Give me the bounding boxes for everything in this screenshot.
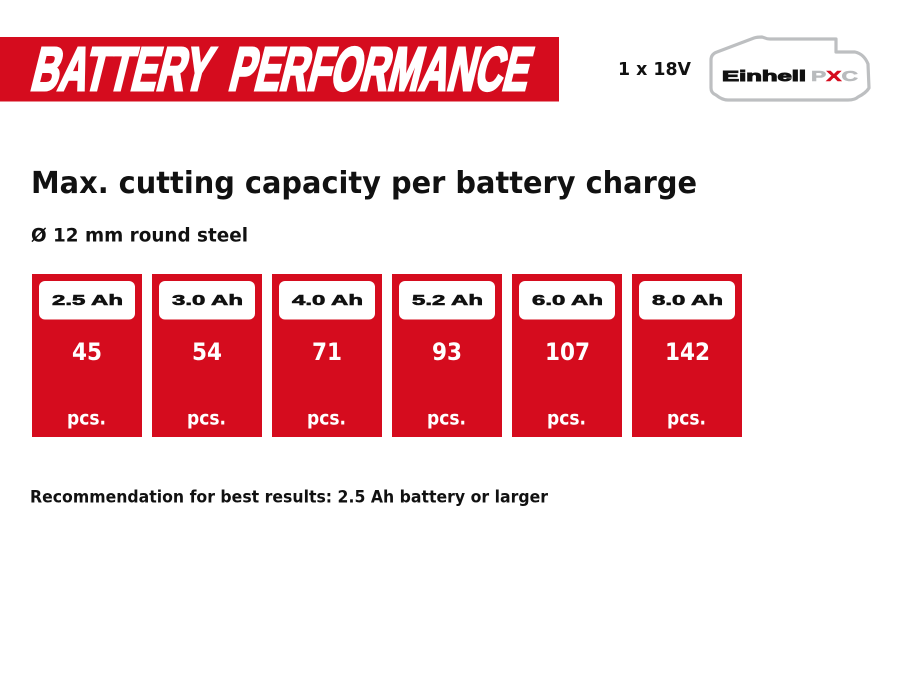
card: 2.5 Ah: 45	[72, 338, 102, 366]
card: 3.0 Ah: pcs.	[187, 406, 226, 430]
card: 4.0 Ah	[272, 274, 382, 437]
subheading: Ø 12 mm round steel	[31, 226, 248, 246]
card: 5.2 Ah	[392, 274, 502, 437]
icon: battery pack logo	[711, 37, 869, 100]
card: 3.0 Ah: 54	[192, 338, 222, 366]
card: 6.0 Ah: pcs.	[547, 406, 586, 430]
banner title	[26, 36, 540, 104]
card: 3.0 Ah	[152, 274, 262, 437]
logo wordmark: Einhell	[722, 68, 806, 85]
banner title: BATTERY	[26, 36, 221, 104]
card: 5.2 Ah: 5.2 Ah	[412, 293, 483, 309]
card: 5.2 Ah: 93	[432, 338, 462, 366]
card: 2.5 Ah: pcs.	[67, 406, 106, 430]
card: 4.0 Ah: 4.0 Ah	[292, 293, 363, 309]
card: 8.0 Ah: pcs.	[667, 406, 706, 430]
card: 6.0 Ah: 107	[545, 338, 590, 366]
card: 4.0 Ah: pcs.	[307, 406, 346, 430]
header banner	[0, 36, 559, 104]
card: 8.0 Ah	[632, 274, 742, 437]
card: 4.0 Ah: 71	[312, 338, 342, 366]
voltage label: 1 x 18V	[618, 59, 691, 80]
card: 3.0 Ah: 3.0 Ah	[172, 293, 243, 309]
card: 6.0 Ah	[512, 274, 622, 437]
card: 6.0 Ah: 6.0 Ah	[532, 293, 603, 309]
card: 2.5 Ah: 2.5 Ah	[52, 293, 123, 309]
card: 8.0 Ah: 142	[665, 338, 710, 366]
recommendation note: Recommendation for best results: 2.5 Ah battery or larger	[30, 488, 549, 508]
card: 2.5 Ah	[32, 274, 142, 437]
banner title: PERFORMANCE	[224, 36, 540, 104]
logo PXC: P X C	[811, 68, 858, 85]
card: 5.2 Ah: pcs.	[427, 406, 466, 430]
heading: Max. cutting capacity per battery charge	[31, 166, 697, 201]
card: 8.0 Ah: 8.0 Ah	[652, 293, 723, 309]
